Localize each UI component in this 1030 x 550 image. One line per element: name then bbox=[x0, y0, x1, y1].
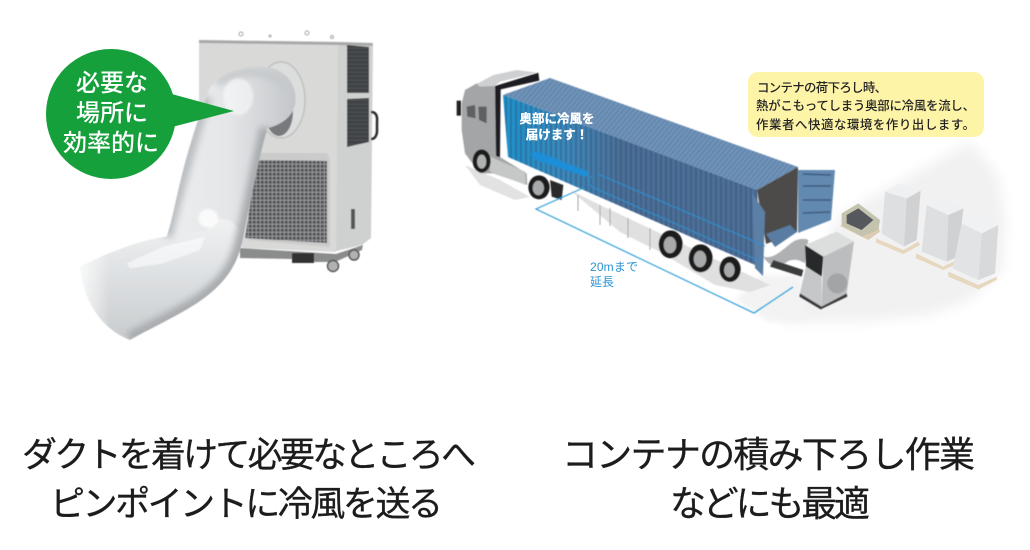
extension label: 20mまで bbox=[590, 260, 638, 274]
callout text: 場所に bbox=[76, 100, 148, 127]
air conditioner unit bbox=[73, 31, 377, 343]
caption: right: などにも最適 bbox=[670, 483, 870, 524]
trailer wheels bbox=[659, 230, 741, 282]
callout text bbox=[63, 70, 159, 157]
cabinet 3 bbox=[948, 213, 998, 289]
duct flange bbox=[257, 62, 305, 138]
cabinet 1 bbox=[876, 183, 921, 254]
front grill bbox=[245, 153, 330, 247]
container label: 届けます！ bbox=[526, 128, 588, 142]
equipment on pallets bbox=[840, 183, 998, 289]
lifting eyes bbox=[239, 31, 334, 38]
container ramp bbox=[766, 225, 797, 247]
unit base and wheels bbox=[240, 245, 363, 272]
extension label: 延長 bbox=[590, 275, 614, 289]
trailer supports bbox=[578, 195, 650, 250]
container side bbox=[503, 95, 762, 268]
trailer chassis shadow bbox=[570, 190, 770, 292]
container label bbox=[519, 111, 595, 142]
note text: コンテナの荷下ろし時、 bbox=[757, 80, 887, 95]
ground shadow bbox=[780, 142, 1005, 322]
container interior bbox=[757, 167, 798, 244]
container label: 奥部に冷風を bbox=[519, 111, 595, 126]
note text: 作業者へ快適な環境を作り出します。 bbox=[756, 117, 975, 132]
note text bbox=[756, 80, 975, 132]
rear drive wheels bbox=[528, 175, 563, 200]
left door bbox=[752, 193, 765, 276]
extension dimension lines bbox=[536, 188, 793, 313]
caption: left: ピンポイントに冷風を送る bbox=[50, 485, 443, 524]
caption: right bbox=[562, 434, 975, 524]
side slot bbox=[351, 209, 355, 229]
unit side panel bbox=[332, 42, 373, 252]
machinery crate bbox=[840, 203, 880, 240]
note text: 熱がこもってしまう奥部に冷風を流し、 bbox=[756, 98, 975, 113]
flexible duct bbox=[73, 66, 296, 343]
extension label bbox=[590, 260, 638, 289]
caption: left bbox=[22, 436, 476, 524]
cabinet 2 bbox=[916, 197, 963, 270]
truck and container bbox=[457, 70, 854, 313]
truck cab bbox=[457, 70, 539, 185]
right door bbox=[798, 170, 835, 233]
unit front panel bbox=[199, 40, 338, 252]
caption: left: ダクトを着けて必要なところへ bbox=[22, 436, 476, 475]
callout: green bubble bbox=[46, 49, 234, 179]
callout text: 効率的に bbox=[63, 130, 159, 157]
blue air arrow bbox=[530, 151, 589, 177]
duct outline in container bbox=[588, 174, 765, 262]
portable cooler bbox=[763, 232, 854, 309]
caption: right: コンテナの積み下ろし作業 bbox=[562, 434, 975, 475]
container top bbox=[503, 78, 798, 190]
handle bbox=[371, 112, 377, 139]
note box bbox=[748, 72, 984, 137]
side vents bbox=[347, 45, 369, 147]
callout text: 必要な bbox=[76, 70, 148, 97]
